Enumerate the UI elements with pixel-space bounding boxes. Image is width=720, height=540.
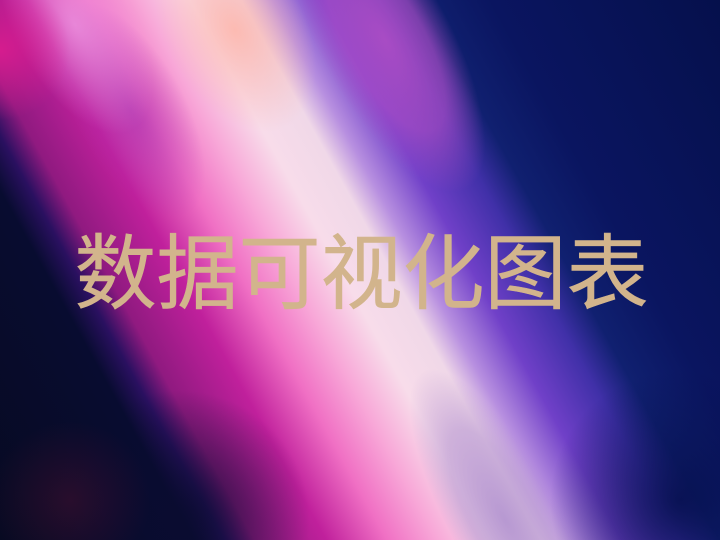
title: 数据可视化图表 bbox=[74, 207, 649, 326]
